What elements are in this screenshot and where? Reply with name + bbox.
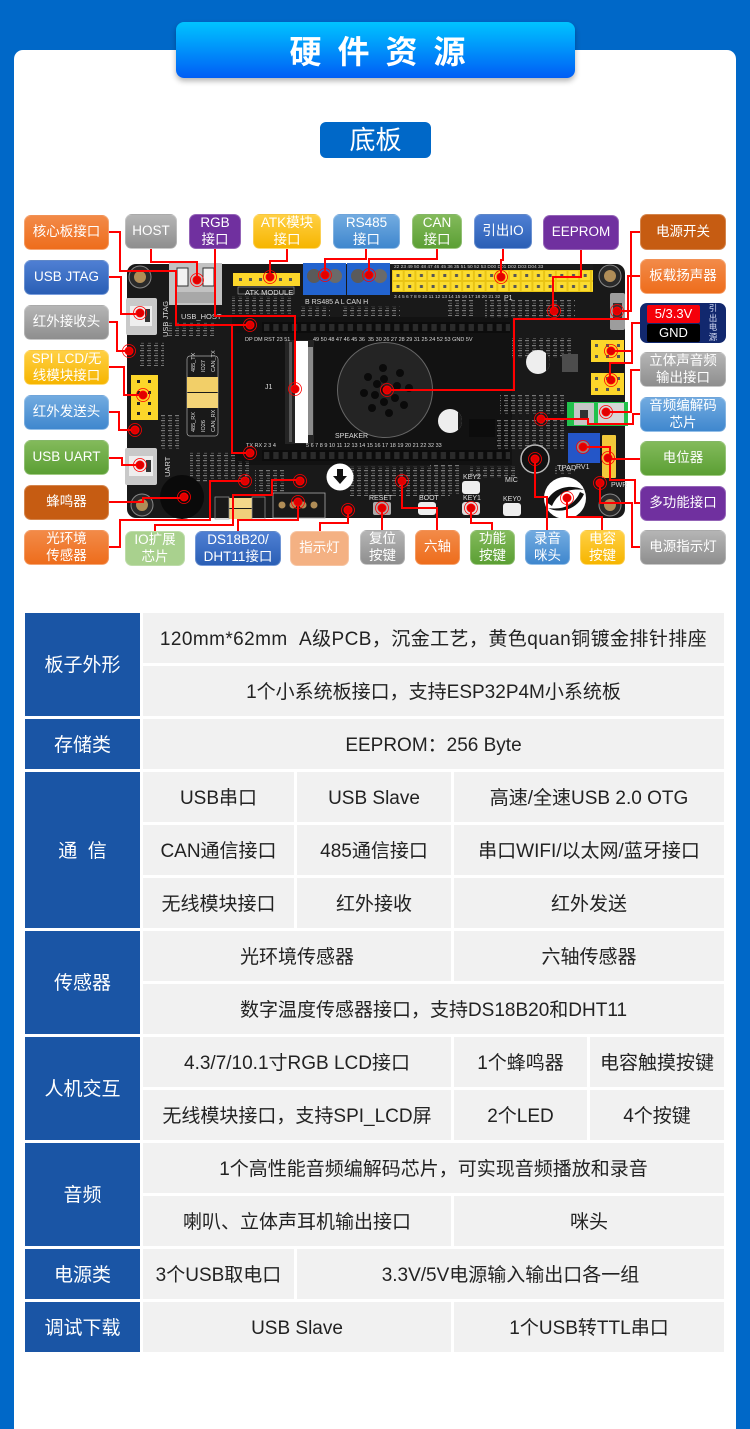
tag: io breakout	[474, 214, 532, 249]
labelled board diagram	[24, 214, 726, 566]
download arrow mark	[326, 464, 354, 490]
cell	[143, 825, 294, 875]
female headers	[235, 322, 510, 461]
row group: power	[25, 1249, 724, 1299]
row group: human interaction	[25, 1037, 724, 1140]
row label	[25, 719, 140, 769]
female headers: 49 50 48 47 46 45 36	[313, 337, 365, 343]
vertical caption	[709, 303, 717, 342]
cell	[454, 1302, 724, 1352]
tag: atk module: ATK模块	[261, 215, 313, 230]
tag: ir transmitter: 红外发送头	[33, 404, 100, 419]
tag: microphone: 咪头	[534, 548, 561, 562]
tag: light sensor: 传感器	[46, 548, 87, 562]
tag: rs485: RS485	[346, 215, 387, 230]
tag: ir transmitter	[24, 395, 109, 430]
power switch	[610, 293, 625, 330]
tag: core board connector	[24, 215, 109, 250]
tag: touch key	[580, 530, 625, 565]
cell	[143, 931, 451, 981]
connector silk labels: CAN_TX	[211, 350, 217, 372]
row label: 传感器	[54, 973, 111, 994]
tag: power led	[640, 530, 726, 565]
tag: touch key: 电容	[589, 531, 616, 546]
multifunction header	[602, 435, 616, 478]
buttons: P1	[504, 295, 513, 302]
tag: stereo output	[640, 352, 726, 387]
cell	[143, 1037, 451, 1087]
mic hole	[521, 445, 549, 473]
ds18b20 socket	[273, 493, 325, 518]
title banner: 硬件资源	[289, 27, 482, 73]
tag: function keys: 功能	[479, 531, 506, 546]
io pin header: 3 4 5 6 7 8 9 10 11 12 13 14 15 16 17 18 20 21 32	[394, 294, 501, 300]
tag: core board connector: 核心板接口	[33, 224, 100, 239]
vertical caption: 引	[709, 303, 717, 313]
tag: eeprom: EEPROM	[552, 224, 610, 239]
female headers: 5 6 7 8 9 10 11 12 13 14 15 16 17 18 19 20 21 22 32 33	[306, 443, 442, 449]
row label: 音频	[63, 1185, 102, 1206]
tag: buzzer	[24, 485, 109, 520]
5v label	[647, 305, 700, 323]
speaker	[338, 342, 432, 438]
tag: usb uart: USB UART	[32, 449, 100, 464]
tag: rgb: RGB	[200, 215, 230, 230]
tag: audio codec: 芯片	[670, 414, 696, 430]
cell	[143, 1196, 451, 1246]
cell	[590, 1037, 724, 1087]
cell: 3个USB取电口	[156, 1264, 281, 1286]
tag: can: 接口	[423, 232, 450, 246]
top row tags	[125, 214, 619, 250]
cell	[454, 931, 724, 981]
tag: usb jtag	[24, 260, 109, 295]
cell	[143, 1249, 294, 1299]
tag: reset	[360, 530, 405, 565]
cell: 4.3/7/10.1寸RGB LCD接口	[184, 1052, 410, 1074]
gnd label	[647, 324, 700, 342]
specification table	[25, 613, 724, 1352]
buttons: RESET	[369, 495, 393, 502]
cell: 六轴传感器	[541, 946, 636, 968]
tag: io breakout: 引出IO	[482, 223, 524, 238]
row label	[25, 772, 140, 928]
buttons: PWR	[611, 482, 627, 489]
stereo and power headers	[591, 340, 624, 395]
buttons: RV1	[576, 464, 590, 471]
tag: light sensor	[24, 530, 109, 565]
atk header: ATK MODULE	[245, 288, 293, 297]
tag: eeprom	[543, 215, 619, 250]
tag: six axis: 六轴	[424, 539, 451, 554]
row label: 电源类	[54, 1264, 111, 1286]
cell: 1个蜂鸣器	[477, 1052, 564, 1074]
buzzer	[160, 475, 204, 519]
tag: ir receiver: 红外接收头	[33, 314, 100, 329]
pcb board	[125, 263, 628, 519]
cell: 喇叭、立体声耳机输出接口	[183, 1212, 411, 1232]
tag: spi lcd: SPI LCD/无	[32, 351, 101, 366]
cell: 4个按键	[623, 1106, 691, 1126]
row label	[25, 931, 140, 1034]
tag: audio codec: 音频编解码	[649, 398, 717, 413]
tag: ir receiver	[24, 305, 109, 340]
row label: 板子外形	[44, 655, 120, 676]
cell	[297, 878, 451, 928]
buttons: BOOT	[419, 495, 440, 502]
cell: 1个小系统板接口，支持ESP32P4M小系统板	[246, 682, 621, 702]
cell	[454, 1090, 587, 1140]
row label: 调试下载	[44, 1318, 120, 1338]
tag: spi lcd	[24, 350, 109, 385]
cell	[143, 984, 724, 1034]
cell	[297, 772, 451, 822]
usb jtag and uart ports: UART	[163, 456, 172, 477]
row group: board shape	[25, 613, 724, 716]
tag: six axis	[415, 530, 460, 565]
tag: rgb: 接口	[201, 232, 228, 246]
row group: communication	[25, 772, 724, 928]
fpc lcd connector	[285, 340, 314, 444]
title banner	[176, 22, 575, 78]
buttons: KEY1	[463, 495, 481, 502]
row group: storage	[25, 719, 724, 769]
tag: multifunction: 多功能接口	[649, 495, 717, 510]
tag: io expander: IO扩展	[134, 532, 176, 547]
tag: power switch: 电源开关	[656, 224, 710, 239]
section heading: base board	[320, 122, 431, 158]
tag: function keys	[470, 530, 515, 565]
connector silk labels: IO27	[201, 360, 207, 372]
cell	[143, 878, 294, 928]
cell: USB串口	[180, 788, 257, 808]
buttons: J1	[265, 384, 272, 391]
atk header	[233, 273, 300, 297]
usb jtag and uart ports	[125, 298, 172, 485]
cell: USB Slave	[328, 788, 420, 808]
tag: rgb	[189, 214, 241, 249]
buttons: KEY2	[463, 474, 481, 481]
tag: multifunction	[640, 486, 726, 521]
cell: 红外接收	[336, 894, 412, 914]
usb host port	[169, 263, 222, 321]
cell	[143, 613, 724, 663]
cell: 1个USB转TTL串口	[509, 1318, 669, 1338]
io pin header: 22 23 49 50 48 47 46 45 36 35 51 50 52 53 D00 D01 D02 D03 D04 33	[394, 264, 544, 270]
cell: 高速/全速USB 2.0 OTG	[490, 788, 688, 808]
tag: stereo output: 输出接口	[656, 370, 710, 384]
tag: function keys: 按键	[479, 548, 506, 562]
row label	[25, 1143, 140, 1246]
usb host port: USB_HOST	[181, 312, 222, 321]
tag: rs485	[333, 214, 400, 249]
connector silk labels: 485_TX	[191, 352, 197, 372]
callout lines	[109, 232, 640, 547]
cell: 电容触摸按键	[600, 1052, 714, 1074]
tag: ds18b20: DHT11接口	[204, 548, 272, 564]
cell: 咪头	[570, 1212, 608, 1232]
cell	[143, 666, 724, 716]
tag: indicator led	[290, 531, 349, 566]
tag: usb jtag: USB JTAG	[34, 269, 99, 284]
tag: can	[412, 214, 462, 249]
row label	[25, 1302, 140, 1352]
vertical caption: 源	[709, 332, 717, 342]
potentiometer	[568, 433, 600, 463]
left column tags	[24, 215, 109, 565]
right column tags	[640, 214, 726, 565]
cell: EEPROM：256 Byte	[345, 734, 522, 756]
cell	[143, 719, 724, 769]
cell: 无线模块接口，支持SPI_LCD屏	[162, 1106, 432, 1126]
cell: CAN通信接口	[160, 840, 277, 862]
tag: reset: 按键	[369, 548, 396, 562]
audio jacks	[567, 402, 628, 426]
cell	[454, 1196, 724, 1246]
cell: 1个高性能音频编解码芯片，可实现音频播放和录音	[219, 1158, 648, 1180]
row label	[25, 1249, 140, 1299]
terminal blocks: B RS485 A L CAN H	[305, 299, 368, 306]
cell: 2个LED	[487, 1106, 554, 1126]
connector silk labels	[191, 350, 217, 432]
buttons: KEY0	[503, 496, 521, 503]
row label: 人机交互	[44, 1079, 120, 1100]
connector silk labels: IO26	[201, 420, 207, 432]
section heading: base board: 底板	[349, 125, 402, 155]
buttons	[265, 295, 627, 516]
io pin header	[392, 264, 593, 300]
cell	[454, 878, 724, 928]
tag: power switch	[640, 214, 726, 250]
tag: touch key: 按键	[589, 548, 616, 562]
tag: onboard speaker: 板载扬声器	[649, 268, 717, 283]
tag: can: CAN	[423, 215, 451, 230]
tag: onboard speaker	[640, 259, 726, 294]
cell: 无线模块接口	[161, 894, 276, 914]
gnd label: GND	[659, 325, 688, 340]
row label: 存储类	[54, 734, 111, 756]
tag: ds18b20	[195, 531, 281, 566]
spi lcd socket	[131, 375, 158, 420]
tag: usb uart	[24, 440, 109, 475]
tag: host	[125, 214, 177, 249]
tag: buzzer: 蜂鸣器	[46, 494, 87, 509]
capacitive touch pad logo	[544, 463, 586, 519]
female headers: DP DM RST 23 51	[245, 337, 290, 343]
row label: 通 信	[58, 840, 107, 862]
vertical caption: 电	[709, 322, 717, 332]
capacitive touch pad logo: TPAD	[557, 463, 577, 472]
row group: debug download	[25, 1302, 724, 1352]
cell: 3.3V/5V电源输入输出口各一组	[382, 1264, 639, 1286]
bottom row tags	[125, 530, 625, 566]
buttons: MIC	[505, 477, 518, 484]
row group: audio	[25, 1143, 724, 1246]
tag: spi lcd: 线模块接口	[33, 368, 100, 382]
cell	[297, 825, 451, 875]
cell	[143, 772, 294, 822]
cell: 485通信接口	[320, 840, 428, 862]
cell	[454, 825, 724, 875]
female headers: 35 30 26 27 28 29 31 25 24 52 53 GND 5V	[368, 337, 473, 343]
buttons: SPEAKER	[335, 433, 368, 440]
tag: host: HOST	[132, 223, 170, 238]
tag: microphone	[525, 530, 570, 565]
5v label: 5/3.3V	[655, 306, 692, 321]
mounting holes	[129, 265, 621, 516]
cell	[454, 772, 724, 822]
cell: 串口WIFI/以太网/蓝牙接口	[478, 840, 700, 862]
usb jtag and uart ports: USB JTAG	[161, 301, 170, 337]
cell	[143, 1090, 451, 1140]
tag: io expander: 芯片	[141, 548, 168, 564]
tag: potentiometer: 电位器	[663, 450, 703, 465]
tag: stereo output: 立体声音频	[649, 353, 717, 368]
boot jumpers	[187, 356, 265, 519]
cell	[143, 1143, 724, 1193]
tag: microphone: 录音	[534, 531, 561, 546]
row label	[25, 1037, 140, 1140]
small smd parts	[140, 296, 575, 496]
female headers: TX RX 2 3 4	[246, 443, 276, 449]
cell	[297, 1249, 724, 1299]
electrolytic capacitors and inductor	[438, 350, 578, 437]
tag: atk module: 接口	[273, 232, 300, 246]
cell: 光环境传感器	[240, 946, 354, 968]
cell: USB Slave	[251, 1318, 343, 1338]
tag: light sensor: 光环境	[46, 531, 87, 546]
cell	[454, 1037, 587, 1087]
callout target dots	[122, 268, 624, 516]
cell: 红外发送	[551, 894, 627, 914]
tag: power led: 电源指示灯	[649, 539, 717, 554]
tag: indicator led: 指示灯	[299, 540, 340, 555]
tag: audio codec	[640, 397, 726, 432]
vertical caption: 出	[709, 312, 717, 322]
row group: sensors	[25, 931, 724, 1034]
terminal blocks	[303, 263, 390, 306]
tag: reset: 复位	[369, 531, 396, 546]
tag: power breakout	[640, 303, 726, 343]
cell: 数字温度传感器接口，支持DS18B20和DHT11	[240, 1000, 627, 1020]
tag: rs485: 接口	[353, 232, 380, 246]
tag: potentiometer	[640, 441, 726, 476]
cell	[590, 1090, 724, 1140]
connector silk labels: CAN_RX	[211, 409, 217, 432]
cell	[143, 1302, 451, 1352]
tag: atk module	[253, 214, 321, 249]
connector silk labels: 485_RX	[191, 412, 197, 432]
tag: io expander	[125, 531, 185, 566]
cell: 120mm*62mm A级PCB，沉金工艺，黄色quan铜镀金排针排座	[160, 628, 707, 650]
tag: ds18b20: DS18B20/	[207, 532, 269, 547]
row label	[25, 613, 140, 716]
